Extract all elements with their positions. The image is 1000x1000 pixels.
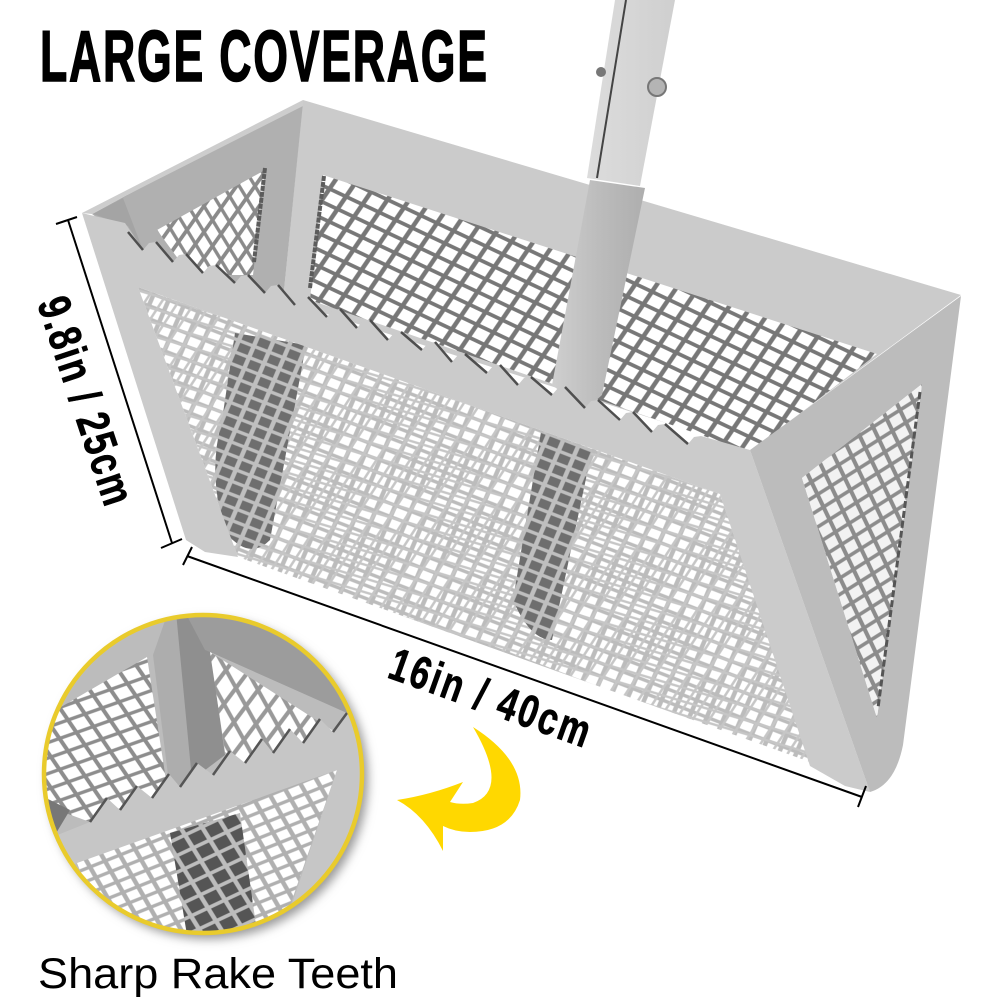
handle shadow centre bbox=[513, 432, 592, 640]
handle socket bbox=[552, 180, 645, 410]
mesh: back wall bbox=[310, 175, 877, 452]
height dimension line bbox=[56, 217, 182, 548]
product: rake basket bbox=[82, 0, 961, 792]
arrow bbox=[397, 727, 520, 851]
left wedge bbox=[93, 198, 143, 250]
teeth shadows bbox=[128, 232, 688, 444]
mesh edge bbox=[254, 168, 324, 288]
side mesh edge bbox=[878, 392, 920, 708]
mesh: left wall bbox=[157, 170, 265, 275]
inset teeth shadows bbox=[90, 713, 347, 822]
inset: sharp rake teeth close-up bbox=[30, 610, 375, 945]
mesh: front face bbox=[138, 287, 810, 762]
mesh: side panel bbox=[802, 384, 922, 718]
bolts bbox=[596, 67, 666, 96]
handle upper tube bbox=[587, 0, 675, 186]
mesh right bbox=[210, 652, 335, 763]
rail with teeth bbox=[58, 714, 360, 902]
corner column left face bbox=[153, 612, 192, 787]
inset caption: Sharp Rake Teeth bbox=[38, 950, 398, 998]
width label: 16in / 40cm bbox=[383, 638, 598, 757]
mesh left bbox=[46, 657, 166, 822]
width dimension line bbox=[183, 547, 866, 807]
inset shadow bbox=[48, 619, 368, 939]
lower mesh bbox=[77, 770, 337, 945]
upper right wall bbox=[188, 617, 348, 713]
back wall bbox=[283, 100, 961, 450]
dark corner bbox=[48, 799, 70, 832]
handle shadow bbox=[170, 813, 256, 935]
inset content bbox=[46, 617, 360, 931]
front rail with sharp teeth bbox=[82, 213, 870, 792]
left wall bbox=[92, 103, 303, 300]
handle shadow left bbox=[215, 333, 306, 549]
title: LARGE COVERAGE bbox=[40, 16, 487, 97]
left wall rim bbox=[82, 100, 303, 214]
corner column right face bbox=[176, 618, 225, 770]
side panel bbox=[750, 296, 961, 792]
inset ring bbox=[44, 615, 362, 933]
height label: 9.8in / 25cm bbox=[27, 290, 145, 511]
